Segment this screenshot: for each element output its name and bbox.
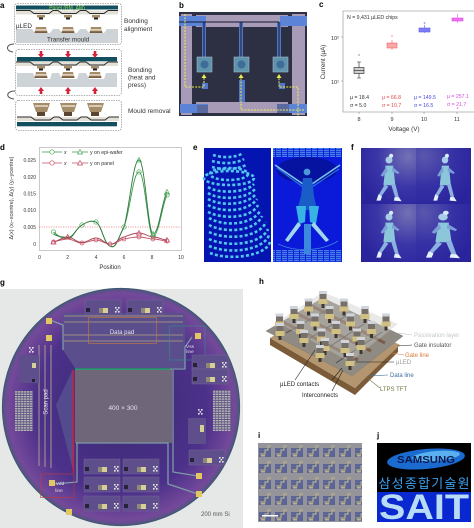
test die groups	[19, 300, 228, 511]
stats: 9 V: σ = 10.7	[382, 103, 401, 109]
label: µLED: µLED	[16, 23, 32, 30]
frame 1	[361, 148, 416, 204]
panel label: b: b	[179, 1, 184, 10]
panel: transfer process schematic	[7, 4, 121, 130]
series: on panel	[51, 230, 170, 246]
x axis title: Position	[99, 265, 121, 271]
label: array size: 400 × 300	[108, 405, 138, 412]
layers	[266, 298, 403, 376]
striped test structures	[15, 390, 231, 431]
panel label: c: c	[319, 0, 324, 9]
label: Vdd line: line	[55, 488, 63, 494]
gold contact pads	[46, 318, 202, 515]
caption: bonding heat and press: (heat and	[128, 74, 156, 82]
y axis title: Δ(x) (xᵢ−xcentre), Δ(y) (yᵢ−ycentre)	[9, 156, 15, 240]
chart: current box plots	[320, 11, 474, 133]
frame 2	[416, 148, 471, 204]
panel label: i: i	[258, 431, 260, 440]
panel label: j: j	[376, 431, 379, 440]
panel label: e: e	[193, 143, 198, 152]
legend: y on panel	[90, 161, 114, 167]
frame 4	[416, 204, 471, 262]
stats: 11 V: µ = 257.1	[447, 94, 469, 100]
substrate	[270, 338, 398, 395]
y axis ticks: 0	[33, 242, 36, 248]
x axis ticks: 9	[390, 117, 394, 123]
box: 8 V	[354, 54, 364, 78]
y axis title: Current (µA)	[320, 45, 327, 79]
scan lines	[39, 345, 51, 468]
current path: yellow dashed	[185, 14, 305, 116]
caption: bonding alignment: Bonding	[124, 18, 148, 25]
x axis ticks: 11	[454, 117, 460, 123]
label: µLED contacts: µLED contacts	[280, 382, 319, 388]
panel label: a: a	[0, 1, 5, 10]
panel label: h: h	[259, 277, 264, 286]
label: Vss line: Vss	[186, 344, 195, 350]
panel label: f: f	[351, 143, 354, 152]
stats: 10 V: σ = 16.5	[414, 103, 433, 109]
x axis ticks: 10	[421, 117, 427, 123]
diagram: pixel array exploded view	[266, 291, 412, 395]
photo: glowing Vitruvian figure	[273, 148, 342, 262]
label: data line: Data line	[390, 373, 414, 379]
y axis ticks: 0.005	[23, 225, 36, 231]
step box: bonding heat and press	[16, 50, 122, 96]
label: data pad: Data pad	[110, 330, 134, 336]
photo: glowing tower	[204, 148, 271, 262]
label: wafer size: 200 mm Si	[201, 512, 230, 518]
photo: pixel micrograph	[258, 443, 362, 522]
Korean wordmark: 삼성종합기술원	[378, 476, 470, 491]
x axis ticks: 10	[178, 255, 184, 261]
stats: 8 V: σ = 5.0	[350, 103, 366, 109]
step box: bonding alignment	[14, 4, 122, 44]
x axis ticks: 4	[95, 255, 98, 261]
x axis title: Voltage (V)	[388, 126, 420, 133]
label: passivation layer: Passivation layer	[414, 333, 459, 339]
pixel chips	[197, 57, 288, 72]
pillars	[275, 291, 390, 370]
label: µLED: µLED	[396, 360, 412, 366]
y axis ticks: 0.015	[23, 192, 36, 198]
legend	[42, 150, 123, 167]
label: gate line: Gate line	[405, 353, 430, 359]
label: transfer mould: Transfer mould	[47, 36, 90, 44]
x axis ticks: 8	[357, 117, 361, 123]
panel label: g: g	[0, 278, 5, 287]
logo ellipse	[386, 446, 466, 472]
caption: mould removal: Mould removal	[128, 108, 171, 115]
frame 3	[361, 204, 416, 262]
label: Vdd line: Vdd	[56, 481, 65, 487]
display array	[75, 369, 172, 443]
chip count note: N = 9,431 µLED chips	[347, 15, 398, 21]
arrow: step 2 to 3	[8, 91, 15, 99]
legend: x	[63, 150, 67, 156]
stats: 10 V: µ = 149.5	[414, 95, 436, 101]
x axis ticks: 6	[123, 255, 126, 261]
scale bar	[262, 515, 278, 516]
photo: logo display	[377, 443, 471, 527]
label: Vss line: line	[186, 349, 194, 355]
array edge lines	[74, 369, 170, 473]
caption: bonding heat and press: press)	[128, 82, 146, 89]
caption: bonding alignment: alignment	[124, 26, 152, 33]
data-pad fan-out region	[63, 313, 185, 368]
box: 9 V	[387, 35, 397, 50]
label: gate insulator: Gate insulator	[414, 343, 451, 349]
panel label: d: d	[0, 143, 5, 152]
series: epi-wafer	[51, 158, 169, 247]
label: scan pad: Scan pad	[44, 389, 50, 415]
y axis ticks: 0.010	[23, 208, 36, 214]
step box: mould removal	[16, 100, 122, 130]
SAIT wordmark: SAIT	[379, 488, 469, 527]
logo wordmark: SAMSUNG	[397, 455, 455, 466]
metal traces	[50, 320, 198, 494]
y axis ticks: 0.020	[23, 175, 36, 181]
stats: 9 V: µ = 66.8	[382, 95, 401, 101]
step box: bonding alignment: Panel (RM_AM)	[49, 5, 85, 11]
arrow: step 1 to 2	[7, 44, 14, 52]
panel: pixel layout	[179, 12, 307, 116]
box: 11 V	[452, 14, 463, 109]
box: 10 V	[419, 22, 430, 33]
label: LTPS TFT: LTPS TFT	[380, 387, 407, 393]
label: interconnects: Interconnects	[302, 393, 338, 399]
photos: four running figure frames	[361, 148, 471, 262]
chart: colour coordinate deviation	[9, 148, 184, 271]
stats: 11 V: σ = 21.7	[447, 102, 466, 108]
legend: y on epi-wafer	[90, 150, 123, 156]
leader lines	[295, 333, 412, 391]
x axis ticks: 0	[38, 255, 41, 261]
x axis ticks: 2	[66, 255, 69, 261]
x axis ticks: 8	[151, 255, 154, 261]
caption: bonding heat and press: Bonding	[128, 67, 152, 74]
legend: x	[63, 161, 67, 167]
y axis ticks: 10²	[331, 36, 339, 42]
photo: 200 mm wafer	[0, 288, 243, 528]
stats: 8 V: µ = 18.4	[350, 95, 369, 101]
red press arrows	[38, 51, 98, 94]
y axis ticks: 10¹	[331, 80, 339, 86]
y axis ticks: 0.025	[23, 158, 36, 164]
